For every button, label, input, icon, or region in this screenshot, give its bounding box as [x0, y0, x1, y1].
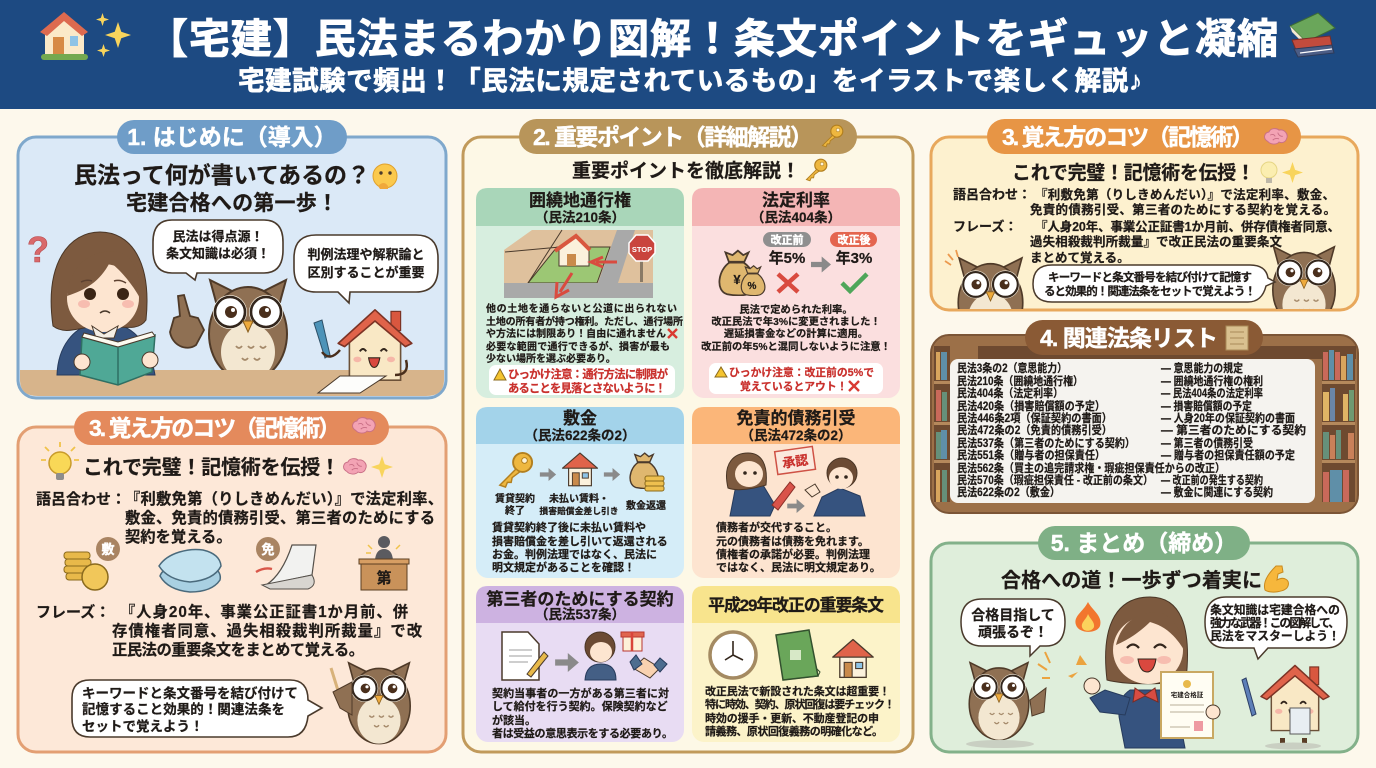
card title: 第三者のためにする契約: [486, 589, 674, 609]
icon: thinking face: [373, 164, 397, 189]
body text: 改正前の年5%と混同しないように注意！: [701, 340, 891, 353]
body text: 債務者が交代すること。: [716, 520, 837, 534]
icon: money bags: [719, 251, 765, 296]
icons: brain and sparkle: [344, 456, 393, 478]
illustration: land map with stop sign: STOP: [632, 245, 652, 254]
card title: [529, 191, 631, 225]
body text: [716, 520, 881, 574]
card title: 囲繞地通行権: [529, 191, 631, 210]
list: right column descriptions: — 損害賠償額の予定: [1161, 399, 1252, 413]
list: left column articles: [957, 361, 1225, 499]
text block: phrase: 存債権者同意、過失相殺裁判所裁量』で改: [112, 622, 423, 640]
speech bubble: memory hint: [1033, 265, 1275, 302]
header band: [0, 0, 1376, 109]
speech bubble: master civil law: [1205, 597, 1347, 659]
card title: （民法622条の2）: [524, 427, 636, 443]
body text: や方法には制限あり！自由に通れません: [486, 327, 666, 340]
icon: money bags: %: [748, 281, 757, 292]
card title: （民法404条）: [751, 209, 841, 225]
icon: folded towel: [159, 550, 221, 592]
text block: phrase: [953, 219, 1340, 265]
panel: 3. memory tips (left): [18, 411, 446, 752]
icon: coins: [64, 537, 120, 590]
icon: flame: [1075, 602, 1101, 632]
text block: wordplay: 語呂合わせ：: [36, 491, 126, 508]
heading: thorough explanation: 重要ポイントを徹底解説！: [572, 159, 800, 182]
illustration: contract to beneficiary: [502, 632, 667, 680]
body text: 改正民法で年3%に変更されました！: [711, 315, 881, 328]
body text: [705, 684, 895, 738]
body text: 土地の所有者が持つ権利。ただし、通行場所: [486, 315, 683, 328]
card title: 平成29年改正の重要条文: [708, 595, 884, 615]
section pill: summary: [1038, 526, 1250, 560]
before/after comparison: [763, 232, 877, 292]
icon: house: [833, 640, 873, 677]
icon: clock: [710, 632, 756, 678]
icon: money bags: ¥: [733, 272, 741, 287]
speech bubble: do my best: 頑張るぞ！: [978, 624, 1048, 640]
icon: flexed arm: [1264, 566, 1288, 592]
list: right column descriptions: [1161, 361, 1306, 499]
flow: key to house to refund: 損害賠償金差し引き: [539, 505, 619, 516]
speech bubble: do my best: [961, 599, 1065, 656]
illustration: debtors handover with approval stamp: 承認: [781, 452, 809, 471]
speech bubble: distinguish from case law: [294, 235, 438, 303]
warning box: [709, 363, 883, 394]
speech bubble: link keywords with article numbers: 記憶すること効果的！関連法条を: [82, 701, 285, 717]
card title: [751, 191, 841, 225]
card title: [736, 409, 856, 443]
body text: 少ない場所を選ぶ必要あり。: [486, 352, 616, 365]
card title: （民法210条）: [535, 209, 625, 225]
panel: 1. introduction: [18, 120, 446, 398]
list: right column descriptions: — 第三者のためにする契約: [1161, 423, 1306, 437]
list: left column articles: 民法622条の2（敷金）: [957, 485, 1060, 499]
icon: red cross: [668, 329, 677, 338]
heading: what is in civil law: 民法って何が書いてあるの？: [74, 162, 370, 188]
section pill: memory tips: 3. 覚え方のコツ（記憶術）: [89, 415, 341, 441]
illustration: owl right: [1272, 245, 1336, 309]
list: right column descriptions: — 敷金に関連にする契約: [1161, 485, 1273, 499]
icons: bulb and sparkle: [1261, 162, 1303, 183]
card title: 敷金: [563, 408, 597, 428]
subtitle: 宅建試験で頻出！「民法に規定されているもの」をイラストで楽しく解説♪: [238, 66, 1142, 96]
text block: phrase: 『人身20年、事業公正証書1か月前、併存債権者同意、: [1035, 219, 1340, 234]
speech bubble: do my best: 合格目指して: [971, 607, 1055, 623]
illustration: girl reading book: [51, 232, 158, 385]
list: right column descriptions: — 第三者の債務引受: [1161, 436, 1253, 450]
section pill: key points: 2. 重要ポイント（詳細解説）: [533, 124, 813, 150]
section pill: summary: 5. まとめ（締め）: [1051, 530, 1237, 556]
body text: 明文規定があることを確認！: [492, 560, 635, 574]
warning box: ひっかけ注意：改正前の5%で: [729, 365, 874, 379]
card title: （民法537条）: [535, 606, 625, 622]
illustration: happy owl: [966, 663, 1046, 748]
illustration: house with pen: [314, 310, 412, 393]
before/after comparison: 年5%: [769, 249, 805, 267]
body text: 遅延損害金などの計算に適用。: [724, 327, 868, 340]
flow: key to house to refund: 賃貸契約: [495, 492, 535, 505]
section pill: memory tips: 3. 覚え方のコツ（記憶術）: [1002, 124, 1254, 150]
body text: 者は受益の意思表示をする必要あり。: [492, 726, 673, 740]
body text: 損害賠償金を差し引いて返還される: [492, 534, 668, 548]
body text: 請義務、原状回復義務の明確化など。: [705, 724, 883, 738]
warning box: [489, 365, 675, 395]
section pill: related articles: [1025, 320, 1263, 355]
list: left column articles: 民法404条（法定利率）: [957, 386, 1063, 400]
illustration: girl with certificate: [1038, 597, 1220, 748]
text block: wordplay: 免責的債務引受、第三者のためにする契約を覚える。: [1030, 202, 1336, 217]
panel: 5. summary: [931, 526, 1358, 752]
section pill: memory tips: [74, 411, 389, 445]
text block: phrase: [36, 603, 423, 659]
body text: 時効の援手・更新、不動産登記の申: [705, 711, 879, 725]
section pill: key points: [519, 119, 857, 154]
speech bubble: distinguish from case law: 判例法理や解釈論と: [307, 247, 425, 262]
flow: key to house to refund: 未払い賃料・: [549, 492, 609, 505]
list: right column descriptions: — 囲繞地通行権の権利: [1161, 374, 1263, 388]
list: left column articles: 民法537条（第三者のためにする契約）: [957, 436, 1135, 450]
illustration: owl pointing: [170, 280, 287, 381]
text block: wordplay: [36, 490, 443, 546]
text block: wordplay: 『利敷免第（りしきめんだい）』で法定利率、: [125, 490, 443, 508]
before/after comparison: 改正前: [770, 232, 804, 246]
table: [20, 370, 444, 396]
speech bubble: civil law is a scoring source: 民法は得点源！: [172, 229, 264, 244]
list card: [950, 359, 1315, 503]
panel: 4. related articles list: [931, 320, 1358, 513]
text block: wordplay: 契約を覚える。: [125, 528, 232, 546]
question mark: ?: [27, 229, 49, 270]
flow: key to house to refund: 終了: [505, 504, 525, 517]
panel: 3. memory tips (right): [930, 119, 1360, 312]
illustration: owl with pointer: [331, 663, 410, 744]
speech bubble: link keywords with article numbers: セットで覚えよう！: [82, 719, 204, 734]
speech bubble: link keywords with article numbers: キーワードと条文番号を結び付けて: [82, 685, 298, 701]
card title: [486, 589, 674, 622]
list: left column articles: 民法210条（囲繞地通行権）: [957, 374, 1083, 388]
body text: 民法で定められた利率。: [739, 303, 853, 316]
text block: wordplay: [953, 187, 1336, 217]
body text: 特に時効、契約、原状回復は要チェック！: [705, 697, 895, 711]
illustration: owl left: [944, 250, 1024, 309]
card: assumption of debt: [692, 407, 900, 578]
icon: document with exemption stamp: [256, 537, 316, 589]
body text: 必要な範囲で通行できるが、損害が最も: [486, 340, 670, 353]
text block: phrase: フレーズ：: [953, 219, 1017, 234]
warning box: あることを見落とさないように！: [508, 381, 666, 395]
speech bubble: civil law is a scoring source: 条文知識は必須！: [166, 246, 270, 261]
icon: sparkles in header: [96, 13, 131, 57]
warning box: ひっかけ注意：通行方法に制限が: [508, 367, 669, 381]
warning box: 覚えているとアウト！: [740, 379, 847, 393]
list: right column descriptions: — 贈与者の担保責任額の予定: [1161, 448, 1295, 462]
list: right column descriptions: — 改正前の発生する契約: [1161, 473, 1263, 487]
card title: （民法472条の2）: [740, 427, 852, 443]
before/after comparison: 改正後: [838, 232, 870, 246]
text block: phrase: 過失相殺裁判所裁量』で改正民法の重要条文: [1030, 234, 1282, 249]
section pill: memory tips: [987, 119, 1301, 154]
text block: phrase: まとめて覚える。: [1030, 250, 1130, 265]
heading: road to success: 合格への道！一歩ずつ着実に: [1001, 569, 1262, 592]
text block: phrase: 正民法の重要条文をまとめて覚える。: [112, 641, 364, 659]
list: left column articles: 民法551条（贈与者の担保責任）: [957, 448, 1105, 462]
icon: document with exemption stamp: 免: [261, 542, 275, 557]
body text: 改正民法で新設された条文は超重要！: [705, 684, 890, 698]
card: 2017 amendment: [692, 586, 900, 742]
icon: light bulb: [41, 442, 79, 480]
icon: third-party podium: 第: [376, 569, 392, 587]
icon: coins: 敷: [101, 542, 115, 557]
list: right column descriptions: — 民法404条の法定利率: [1161, 386, 1263, 400]
heading: memory tips: これで完璧！記憶術を伝授！: [83, 455, 340, 479]
speech bubble: master civil law: 強力な武器！この図解して、: [1210, 616, 1340, 630]
body text: して給付を行う契約。保険契約など: [492, 699, 668, 713]
icon: stack of books: [1290, 13, 1335, 57]
card: right of passage: [476, 188, 684, 398]
heading: memory tips: これで完璧！記憶術を伝授！: [1012, 161, 1255, 184]
text block: wordplay: 語呂合わせ：: [953, 187, 1031, 202]
section pill: introduction: [117, 120, 347, 154]
list: left column articles: 民法472条の2（免責的債務引受）: [957, 423, 1112, 437]
card title: [524, 408, 636, 443]
illustration: house with clipboard: [1242, 665, 1329, 750]
section pill: introduction: 1. はじめに（導入）: [127, 124, 337, 150]
illustration: girl with certificate: 宅建合格証: [1171, 690, 1204, 699]
body text: [492, 520, 668, 574]
text block: phrase: フレーズ：: [36, 603, 110, 621]
card: third party contract: [476, 586, 684, 742]
illustration: land map with stop sign: [504, 230, 655, 298]
heading: what is in civil law: 宅建合格への第一歩！: [126, 192, 338, 215]
icon: third-party podium: [359, 536, 409, 590]
section pill: related articles: 4. 関連法条リスト: [1040, 325, 1218, 351]
list: left column articles: 民法420条（損害賠償額の予定）: [957, 399, 1105, 413]
speech bubble: master civil law: 条文知識は宅建合格への: [1210, 603, 1340, 617]
before/after comparison: 年3%: [836, 249, 872, 267]
speech bubble: civil law is a scoring source: [153, 220, 283, 280]
list: right column descriptions: — 意思能力の規定: [1161, 361, 1243, 375]
body text: ではなく、民法に明文規定あり。: [716, 560, 881, 574]
body text: [701, 303, 891, 353]
heading: what is in civil law: [74, 162, 370, 215]
list: left column articles: 民法570条（瑕疵担保責任 - 改正前の条文）: [957, 473, 1153, 487]
text block: phrase: 『人身20年、事業公正証書1か月前、併: [120, 603, 408, 621]
speech bubble: distinguish from case law: 区別することが重要: [307, 265, 425, 280]
speech bubble: memory hint: キーワードと条文番号を結び付けて記憶す: [1048, 270, 1252, 284]
speech bubble: link keywords with article numbers: [72, 680, 322, 737]
panel: 2. key points: [463, 119, 913, 752]
body text: 債権者の承諾が必要。判例法理: [716, 547, 870, 561]
speech bubble: master civil law: 民法をマスターしよう！: [1210, 629, 1340, 643]
flow: key to house to refund: [495, 453, 666, 517]
icon: green law book: [776, 630, 820, 680]
body text: [492, 686, 673, 740]
card title: 免責的債務引受: [736, 409, 856, 428]
card: statutory interest: [692, 188, 900, 398]
body text: お金。判例法理ではなく、民法に: [492, 547, 657, 561]
body text: が該当。: [492, 713, 536, 727]
text block: wordplay: 敷金、免責的債務引受、第三者のためにする: [125, 509, 435, 527]
illustration: debtors handover with approval stamp: [726, 446, 865, 516]
flow: key to house to refund: 敷金返還: [626, 499, 666, 512]
body text: 賃貸契約終了後に未払い賃料や: [492, 520, 646, 534]
list: right column descriptions: — 人身20年の保証契約の書面: [1161, 411, 1295, 425]
icon: house in header: [40, 12, 88, 60]
body text: 他の土地を通らないと公道に出られない: [486, 302, 677, 315]
speech bubble: memory hint: ると効果的！関連法条をセットで覚えよう！: [1044, 284, 1256, 298]
list: left column articles: 民法3条の2（意思能力）: [957, 361, 1067, 375]
body text: 元の債務者は債務を免れます。: [716, 534, 869, 548]
card: security deposit: [476, 407, 684, 578]
body text: 契約当事者の一方がある第三者に対: [492, 686, 669, 700]
title: 【宅建】民法まるわかり図解！条文ポイントをギュッと凝縮: [147, 16, 1278, 62]
card title: 法定利率: [762, 191, 830, 210]
text block: wordplay: 『利敷免第（りしきめんだい）』で法定利率、敷金、: [1035, 187, 1335, 202]
list: left column articles: 民法562条（買主の追完請求権・瑕疵担保責任からの改正）: [957, 461, 1225, 475]
bookshelf backdrop: [934, 346, 1356, 502]
list: left column articles: 民法446条2項（保証契約の書面）: [957, 411, 1112, 425]
body text: [486, 302, 683, 365]
